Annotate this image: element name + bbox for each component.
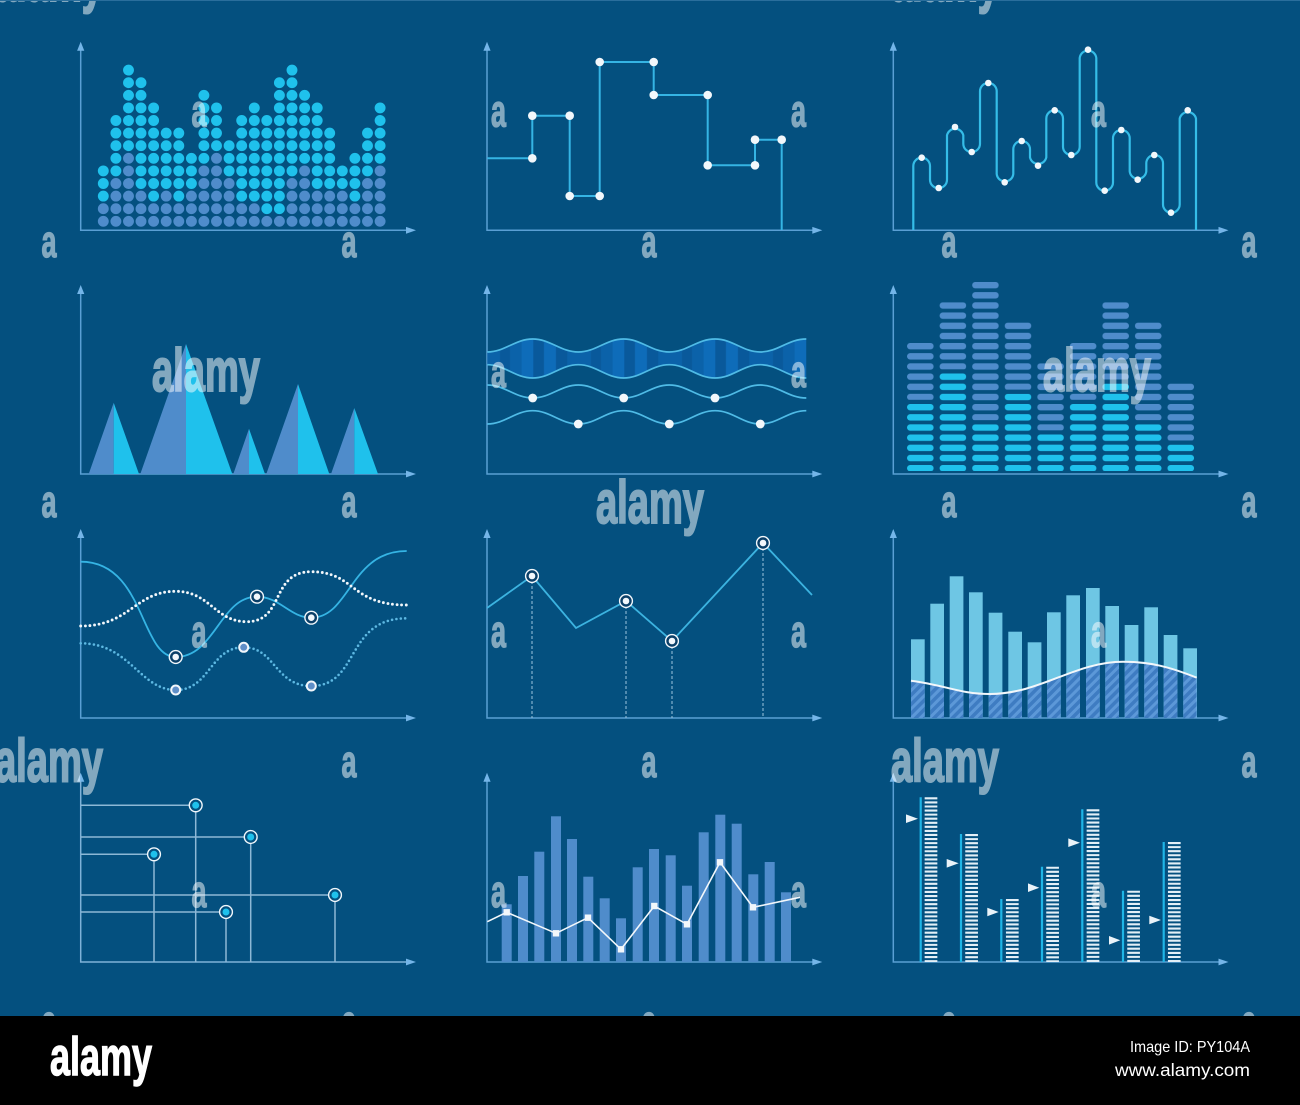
- axis arrowheads: [890, 773, 1228, 965]
- axes: [487, 535, 814, 718]
- cyan upper dots: [103, 69, 380, 209]
- axis arrowheads: [77, 773, 416, 965]
- chart: serpentine line: [890, 42, 1228, 234]
- ring markers: [148, 799, 341, 918]
- serpentine path: [913, 51, 1196, 230]
- watermark overlay: alamy: [152, 337, 260, 404]
- watermark overlay: a: [1091, 606, 1107, 657]
- watermark overlay: a: [491, 346, 507, 397]
- striped wave band: [487, 339, 806, 378]
- wave markers: [528, 394, 765, 428]
- watermark overlay: a: [791, 346, 807, 397]
- axis arrowheads: [483, 529, 822, 721]
- axis arrowheads: [483, 773, 822, 965]
- blue dotted curve: [81, 618, 407, 690]
- watermark overlay: alamy: [0, 728, 103, 794]
- watermark overlay: a: [491, 606, 507, 657]
- watermark overlay: alamy: [596, 469, 704, 536]
- watermark overlay: alamy: [1043, 337, 1151, 404]
- markers on blue dotted curve: [171, 643, 316, 694]
- watermark overlay: a: [192, 606, 207, 657]
- watermark overlay: a: [342, 736, 357, 787]
- chart: striped bars with flags: [890, 773, 1228, 965]
- axis arrowheads: [77, 285, 416, 477]
- blue lower dots: [103, 157, 380, 221]
- ring markers: [526, 537, 769, 647]
- watermark overlay: a: [1242, 476, 1257, 527]
- striped blocks: [931, 797, 1174, 962]
- chart: dot column histogram: [77, 42, 416, 234]
- axes: [81, 48, 408, 230]
- square markers: [504, 859, 756, 952]
- watermark overlay: a: [491, 866, 507, 917]
- watermark overlay: a: [342, 476, 357, 527]
- axes: [487, 779, 814, 962]
- watermark overlay: a: [642, 996, 657, 1047]
- cyan triangle halves: [114, 344, 378, 474]
- axis arrowheads: [77, 42, 416, 234]
- step markers: [528, 58, 786, 200]
- watermark overlay: a: [942, 216, 957, 267]
- watermark overlay: a: [42, 996, 57, 1047]
- watermark overlay: a: [791, 866, 807, 917]
- watermark overlay: a: [491, 86, 507, 136]
- white curve: [911, 662, 1197, 694]
- footer bar: [0, 1016, 1300, 1105]
- axis arrowheads: [890, 285, 1228, 477]
- axis arrowheads: [483, 42, 822, 234]
- axes: [81, 535, 408, 718]
- chart: sine waves: [483, 285, 822, 477]
- watermark overlay: a: [342, 216, 357, 267]
- axis arrowheads: [77, 529, 416, 721]
- axis arrowheads: [890, 529, 1228, 721]
- ring markers on solid curve: [169, 590, 318, 663]
- watermark overlay: a: [192, 86, 207, 136]
- top edge highlight: [0, 0, 1300, 1]
- axes: [893, 535, 1220, 718]
- watermark overlay: a: [42, 476, 57, 527]
- step line: [487, 62, 782, 230]
- footer background: [0, 1016, 1300, 1105]
- watermark overlay: a: [942, 996, 957, 1047]
- watermark overlay: a: [791, 606, 807, 657]
- chart: bars with line overlay: [483, 773, 822, 965]
- axes: [81, 291, 408, 474]
- flag triangles: [906, 814, 1161, 945]
- axis arrowheads: [483, 285, 822, 477]
- chart: crossing coordinate lines: [77, 773, 416, 965]
- axis arrowheads: [890, 42, 1228, 234]
- cyan segments: [907, 373, 1194, 471]
- white line: [487, 862, 800, 949]
- watermark overlay: a: [1242, 996, 1257, 1047]
- blue bars: [502, 815, 791, 962]
- wave lines: [487, 339, 806, 424]
- blue segments: [907, 282, 1194, 440]
- watermark overlay: a: [42, 216, 57, 267]
- footer logo: alamy: [50, 1027, 152, 1087]
- light bars: [911, 576, 1197, 718]
- watermark overlay: a: [642, 216, 657, 267]
- chart: triangle peaks: [77, 285, 416, 477]
- axes: [487, 48, 814, 230]
- chart: bars with hatched area: [890, 529, 1228, 721]
- chart: smooth curves: [77, 529, 416, 721]
- watermark overlay: a: [1242, 216, 1257, 267]
- watermark overlay: a: [1242, 736, 1257, 787]
- watermark overlay: a: [942, 476, 957, 527]
- blue triangle halves: [89, 344, 354, 474]
- hatched bar bases: [911, 662, 1197, 718]
- chart: equalizer bars: [890, 282, 1228, 477]
- chart: step line: [483, 42, 822, 234]
- guide lines: [81, 805, 335, 962]
- watermark overlay: a: [1091, 866, 1107, 917]
- watermark overlay: a: [192, 866, 207, 917]
- axes: [893, 48, 1220, 230]
- chart: line with dashed drop lines: [483, 529, 822, 721]
- watermark overlay: a: [791, 86, 807, 136]
- image id: Image ID: PY104A: [1130, 1039, 1250, 1056]
- watermark overlay: alamy: [891, 728, 999, 794]
- watermark overlay: a: [1091, 86, 1107, 136]
- axes: [487, 291, 814, 474]
- dashed drop lines: [532, 543, 763, 718]
- watermark overlay: a: [642, 736, 657, 787]
- website: www.alamy.com: [1114, 1060, 1250, 1080]
- cyan bar lines: [921, 797, 1164, 962]
- axes: [81, 779, 408, 962]
- serpentine markers: [918, 46, 1191, 216]
- watermark overlay: a: [342, 996, 357, 1047]
- white dotted curve: [81, 572, 407, 626]
- axes: [893, 779, 1220, 962]
- solid curve: [81, 551, 407, 657]
- axes: [893, 291, 1220, 474]
- polyline: [487, 543, 812, 641]
